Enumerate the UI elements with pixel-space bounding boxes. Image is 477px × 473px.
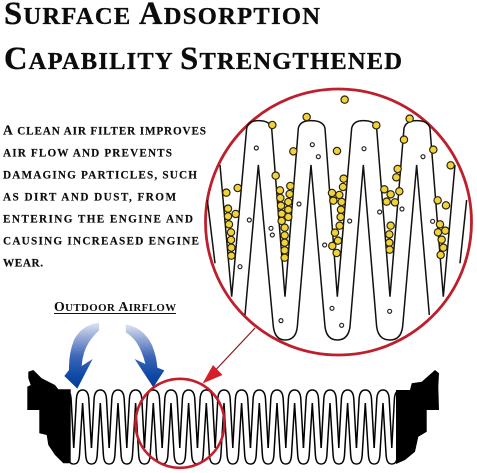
callout arrow — [202, 328, 255, 384]
right filter frame — [396, 370, 439, 464]
small white particles — [238, 143, 435, 327]
title: CAPABILITY STRENGTHENED — [4, 41, 402, 77]
magnified pleats — [207, 121, 467, 340]
body text — [3, 122, 206, 270]
left filter frame — [27, 370, 71, 463]
body text: ENTERING THE ENGINE AND — [3, 214, 193, 226]
magnified circle — [206, 89, 472, 355]
title — [4, 0, 402, 77]
icon: left airflow arrow — [64, 323, 99, 389]
body text: AIR FLOW AND PREVENTS — [3, 148, 172, 160]
body text: A CLEAN AIR FILTER IMPROVES — [3, 122, 206, 138]
icon: right airflow arrow — [126, 324, 164, 387]
body text: AS DIRT AND DUST, FROM — [3, 192, 176, 204]
body text: CAUSING INCREASED ENGINE — [3, 236, 199, 248]
body text: DAMAGING PARTICLES, SUCH — [3, 170, 197, 182]
filter pleats — [56, 390, 409, 464]
body text: WEAR. — [3, 258, 43, 270]
outdoor airflow label: OUTDOOR AIRFLOW — [54, 299, 176, 314]
yellow dirt particles — [223, 96, 454, 261]
small red detail circle — [136, 379, 224, 468]
